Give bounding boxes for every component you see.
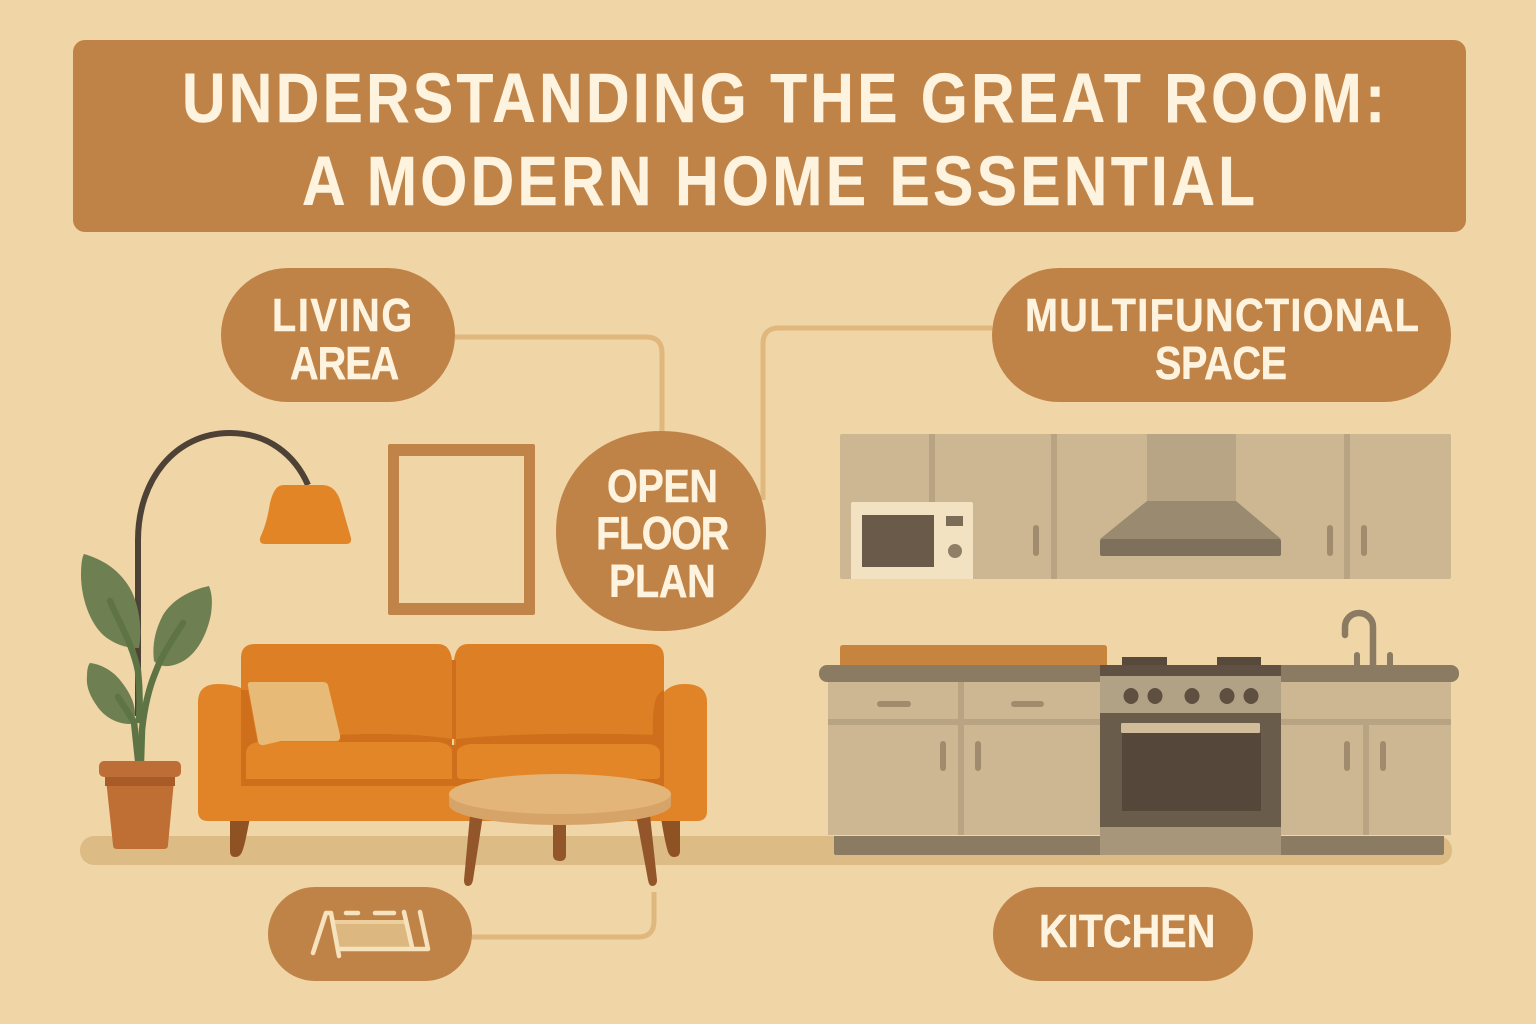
label: rug icon pill xyxy=(268,887,472,981)
throw pillow xyxy=(248,682,340,745)
label: open floor plan: OPEN xyxy=(607,461,718,513)
coffee table xyxy=(449,774,671,886)
floor lamp xyxy=(138,433,351,716)
lamp shade xyxy=(260,485,351,544)
table top xyxy=(449,785,671,825)
cutting board xyxy=(840,645,1107,666)
floor strip xyxy=(80,836,1452,865)
pot xyxy=(99,761,181,849)
title banner: A MODERN HOME ESSENTIAL xyxy=(302,142,1255,220)
title banner: UNDERSTANDING THE GREAT ROOM: xyxy=(182,59,1385,137)
countertop xyxy=(819,665,1459,682)
connector: rug label to coffee table xyxy=(472,892,654,937)
label: multifunctional space xyxy=(992,268,1451,402)
sofa arms and base xyxy=(198,684,707,821)
microwave xyxy=(851,502,973,579)
sofa legs xyxy=(230,818,680,857)
oven range xyxy=(1100,665,1281,855)
label: living area xyxy=(221,268,455,402)
sofa seat cushions xyxy=(246,742,452,779)
label: multifunctional space: MULTIFUNCTIONAL xyxy=(1025,290,1419,342)
sofa shadow panel xyxy=(241,660,664,786)
sofa back cushions xyxy=(241,644,452,790)
leaves and stems xyxy=(81,554,212,761)
table legs xyxy=(464,815,657,886)
connector: living area to open floor plan xyxy=(455,337,662,432)
label: multifunctional space: SPACE xyxy=(1155,338,1287,390)
kitchen upper cabinets xyxy=(840,434,1451,579)
cabinet handles xyxy=(1033,525,1367,556)
label: kitchen: KITCHEN xyxy=(1039,906,1215,958)
wall picture frame xyxy=(388,444,535,615)
faucet xyxy=(1345,613,1390,665)
label: living area: AREA xyxy=(290,338,399,390)
connector: multifunctional space to open floor plan xyxy=(763,328,992,500)
oven window xyxy=(1122,733,1261,811)
base cabinets left xyxy=(828,682,1100,835)
icon: rug xyxy=(313,912,428,956)
potted plant xyxy=(81,554,212,849)
label: kitchen xyxy=(993,887,1253,981)
label: living area: LIVING xyxy=(272,290,412,342)
base cabinets right xyxy=(1281,682,1451,835)
label: open floor plan: FLOOR xyxy=(596,508,729,560)
range hood xyxy=(1100,434,1281,556)
label: open floor plan: PLAN xyxy=(609,556,716,608)
oven knobs xyxy=(1124,688,1258,704)
title banner xyxy=(73,40,1466,232)
label: open floor plan xyxy=(556,431,766,631)
cabinet plinth xyxy=(834,836,1444,855)
stove burners xyxy=(1122,657,1167,666)
sofa xyxy=(198,644,707,857)
kitchen counter and base cabinets xyxy=(819,613,1459,855)
oven handle xyxy=(1121,723,1260,733)
